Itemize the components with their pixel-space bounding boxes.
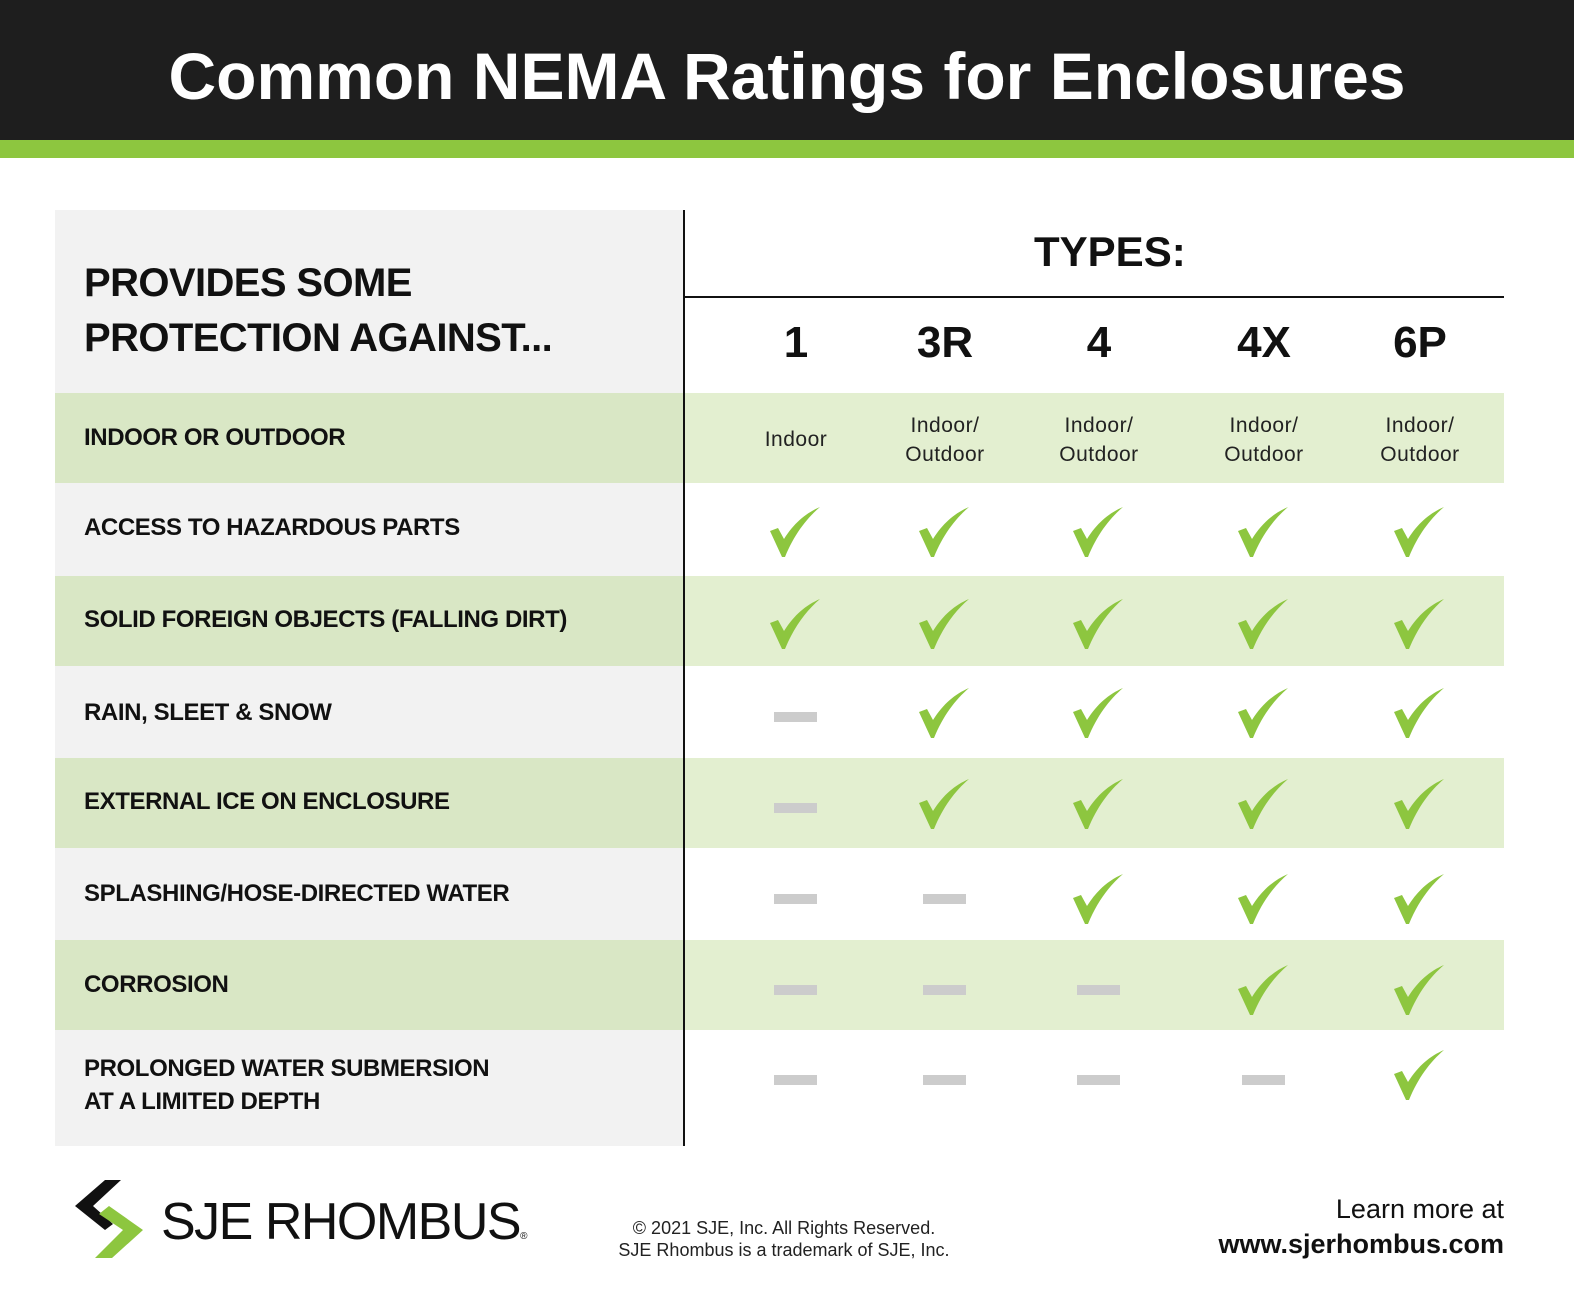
- type headers: 6P: [1393, 318, 1447, 367]
- copyright: SJE Rhombus is a trademark of SJE, Inc.: [618, 1240, 950, 1260]
- type headers: 3R: [917, 318, 973, 367]
- indoor/outdoor row: Outdoor: [1059, 443, 1139, 466]
- row labels: PROLONGED WATER SUBMERSION: [84, 1055, 489, 1082]
- row labels: SPLASHING/HOSE-DIRECTED WATER: [84, 880, 509, 907]
- left column backgrounds: [55, 210, 684, 1146]
- row labels: AT A LIMITED DEPTH: [84, 1088, 320, 1115]
- row labels: INDOOR OR OUTDOOR: [84, 424, 345, 451]
- heading: provides some protection against: PROVIDES SOME: [84, 261, 412, 305]
- indoor/outdoor row: Indoor/: [1386, 414, 1454, 437]
- copyright: © 2021 SJE, Inc. All Rights Reserved.: [633, 1218, 935, 1238]
- row labels: RAIN, SLEET & SNOW: [84, 699, 331, 726]
- type headers: [784, 318, 1447, 367]
- green stripe: [0, 140, 1574, 158]
- indoor/outdoor row: Outdoor: [1380, 443, 1460, 466]
- copyright: [618, 1218, 950, 1260]
- title: Common NEMA Ratings for Enclosures: [168, 39, 1406, 113]
- heading: types: TYPES:: [1034, 228, 1186, 275]
- indoor/outdoor row: Outdoor: [1224, 443, 1304, 466]
- logo: SJE RHOMBUS®: [161, 1193, 526, 1251]
- indoor/outdoor row: [765, 414, 1460, 466]
- learn more: Learn more at: [1336, 1194, 1504, 1224]
- indoor/outdoor row: Indoor/: [1065, 414, 1133, 437]
- type headers: 4X: [1237, 318, 1291, 367]
- type headers: 4: [1087, 318, 1111, 367]
- learn more: www.sjerhombus.com: [1218, 1229, 1504, 1259]
- heading: provides some protection against: [84, 261, 552, 360]
- row labels: CORROSION: [84, 971, 228, 998]
- indoor/outdoor row: Indoor/: [911, 414, 979, 437]
- row labels: EXTERNAL ICE ON ENCLOSURE: [84, 788, 450, 815]
- check/dash grid: [770, 507, 1444, 1100]
- row labels: ACCESS TO HAZARDOUS PARTS: [84, 514, 460, 541]
- indoor/outdoor row: Indoor/: [1230, 414, 1298, 437]
- logo: [75, 1180, 528, 1258]
- header bar: [0, 0, 1574, 140]
- row labels: SOLID FOREIGN OBJECTS (FALLING DIRT): [84, 606, 567, 633]
- indoor/outdoor row: Outdoor: [905, 443, 985, 466]
- indoor/outdoor row: Indoor: [765, 428, 827, 451]
- heading: provides some protection against: PROTECTION AGAINST...: [84, 316, 552, 360]
- type headers: 1: [784, 318, 808, 367]
- learn more: [1218, 1194, 1504, 1259]
- row labels: [84, 424, 567, 1115]
